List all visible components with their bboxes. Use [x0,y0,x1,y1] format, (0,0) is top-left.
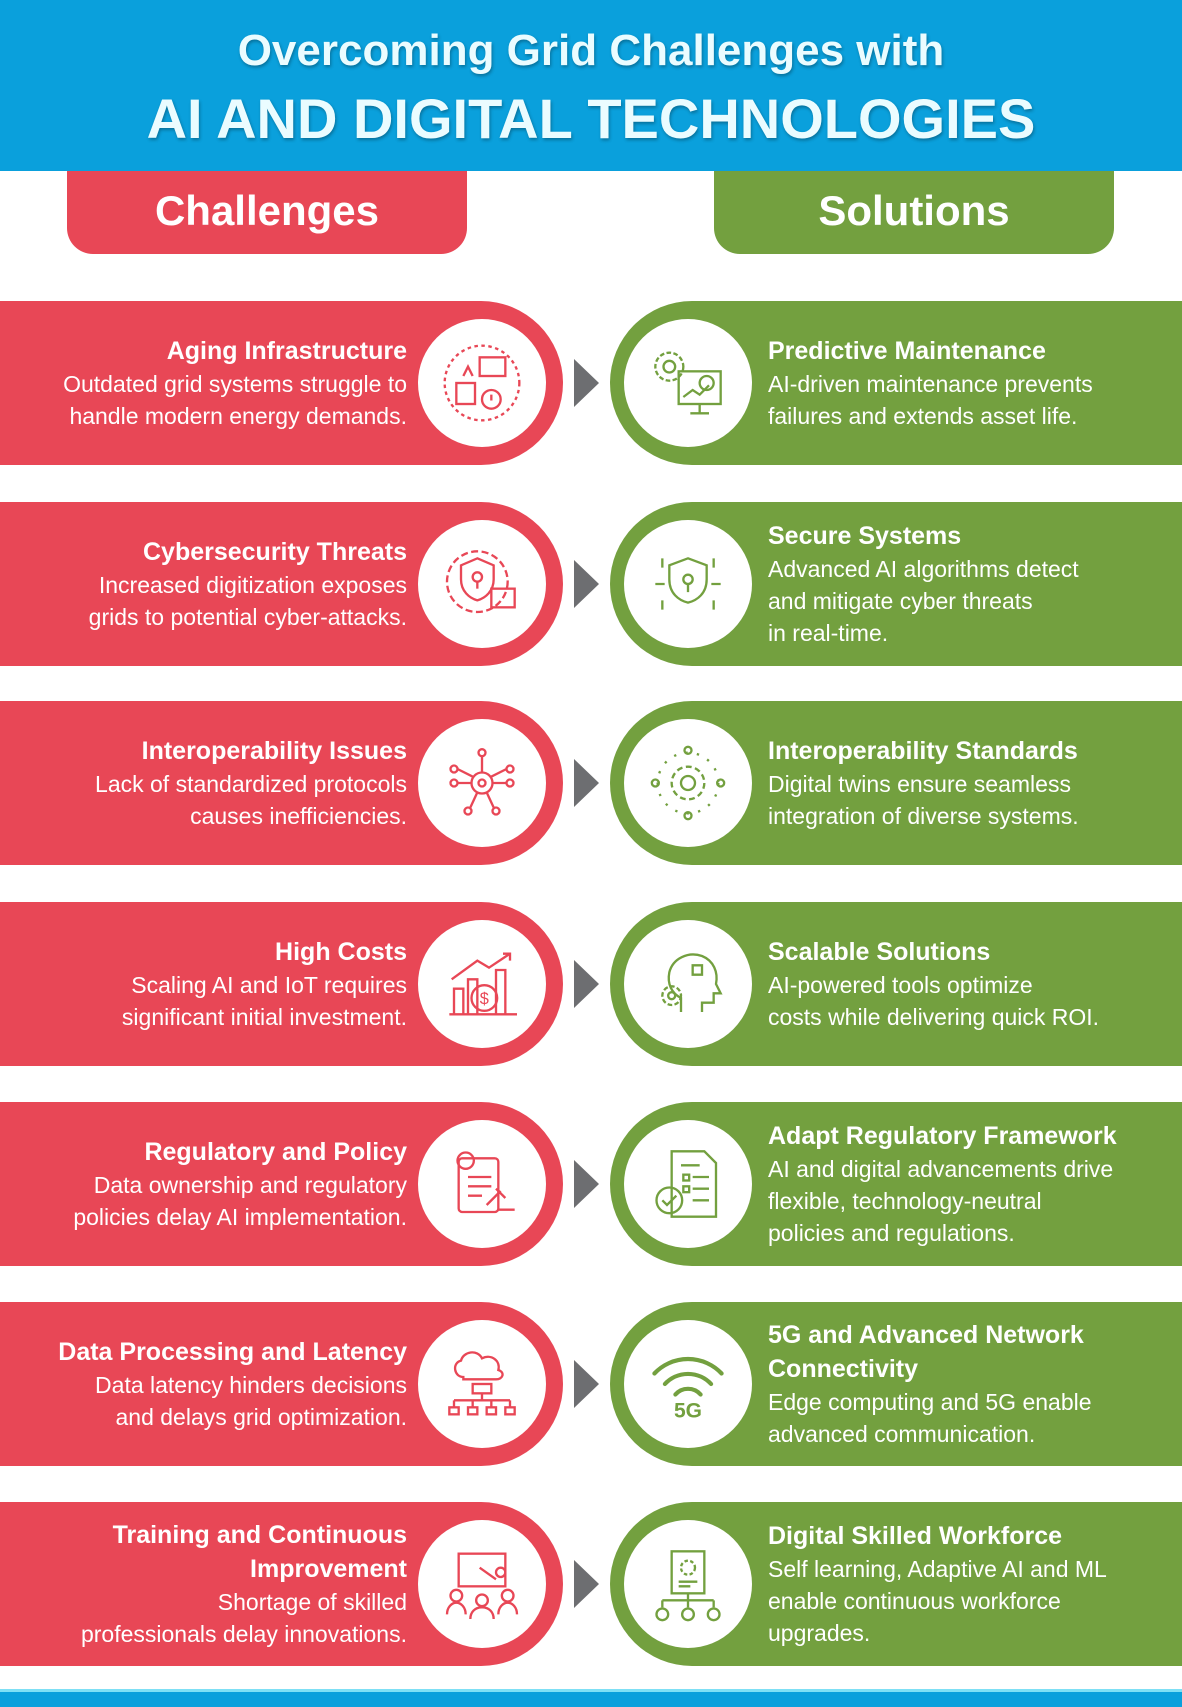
text: advanced communication. [768,1421,1035,1447]
tab: solutions: Solutions [818,187,1010,234]
solution 7 [610,1502,1182,1666]
challenge 5 [0,1102,563,1266]
solution 3 [610,701,1182,865]
text: Data ownership and regulatory [94,1172,407,1198]
arrow [574,960,599,1008]
text: Connectivity [768,1355,918,1383]
header [0,0,1182,171]
text [768,1321,1092,1447]
icon: high costs chart [418,920,546,1048]
text: enable continuous workforce [768,1588,1061,1614]
icon: framework document [624,1120,752,1248]
text: Improvement [250,1555,407,1583]
icon: interoperability network [418,719,546,847]
text [63,337,407,429]
tab: solutions [714,171,1114,254]
icon: predictive maintenance [624,319,752,447]
icon: workforce [624,1520,752,1648]
icon: aging infrastructure [418,319,546,447]
text [768,1522,1107,1646]
arrow [574,1160,599,1208]
tab: challenges: Challenges [155,187,379,234]
challenge 1 [0,301,563,465]
text: Interoperability Standards [768,737,1078,765]
text [768,1122,1117,1246]
text: Data latency hinders decisions [95,1372,407,1398]
text [122,938,407,1030]
text: Regulatory and Policy [144,1138,407,1166]
icon: 5G signal: 5G [674,1400,702,1423]
text: Interoperability Issues [142,737,407,765]
text: Secure Systems [768,522,961,550]
text: AI-powered tools optimize [768,972,1033,998]
text: Outdated grid systems struggle to [63,371,407,397]
text: AI-driven maintenance prevents [768,371,1093,397]
text: Digital Skilled Workforce [768,1522,1062,1550]
text: costs while delivering quick ROI. [768,1004,1099,1030]
tab: challenges [67,171,467,254]
arrow [574,1360,599,1408]
challenge 4 [0,902,563,1066]
text: flexible, technology-neutral [768,1188,1042,1214]
footer bar [0,1689,1182,1707]
text: Adapt Regulatory Framework [768,1122,1117,1150]
text: Scaling AI and IoT requires [131,972,407,998]
text: significant initial investment. [122,1004,407,1030]
text: Training and Continuous [113,1521,407,1549]
text: Increased digitization exposes [99,572,407,598]
solution 6 [610,1302,1182,1466]
text: professionals delay innovations. [81,1621,407,1647]
icon: scalable head gears [624,920,752,1048]
text [768,938,1099,1030]
challenge 3 [0,701,563,865]
arrow [574,359,599,407]
solution 2 [610,502,1182,666]
text: Digital twins ensure seamless [768,771,1071,797]
text [81,1521,407,1647]
text: Edge computing and 5G enable [768,1389,1092,1415]
text [58,1338,407,1430]
text: Self learning, Adaptive AI and ML [768,1556,1107,1582]
text: upgrades. [768,1620,870,1646]
text: in real-time. [768,620,888,646]
text: Predictive Maintenance [768,337,1046,365]
title line 1: Overcoming Grid Challenges with [238,26,944,75]
text [768,737,1079,829]
icon: training [418,1520,546,1648]
text: grids to potential cyber-attacks. [89,604,407,630]
text: Scalable Solutions [768,938,990,966]
text: Data Processing and Latency [58,1338,407,1366]
text: Cybersecurity Threats [143,538,407,566]
icon: high costs chart: $ [480,990,489,1008]
text [95,737,407,829]
text: failures and extends asset life. [768,403,1077,429]
text: and delays grid optimization. [116,1404,407,1430]
icon: 5G signal [624,1320,752,1448]
text: and mitigate cyber threats [768,588,1033,614]
icon: gear network [624,719,752,847]
text: AI and digital advancements drive [768,1156,1113,1182]
solution 4 [610,902,1182,1066]
text: High Costs [275,938,407,966]
text: handle modern energy demands. [69,403,407,429]
icon: cybersecurity [418,520,546,648]
text: Lack of standardized protocols [95,771,407,797]
challenge 7 [0,1502,563,1666]
solution 5 [610,1102,1182,1266]
text [73,1138,407,1230]
text: integration of diverse systems. [768,803,1079,829]
text [768,337,1093,429]
text: Advanced AI algorithms detect [768,556,1079,582]
text [768,522,1079,646]
icon: cloud data [418,1320,546,1448]
arrow [574,759,599,807]
text: 5G and Advanced Network [768,1321,1084,1349]
text: Aging Infrastructure [167,337,407,365]
solution 1 [610,301,1182,465]
text: causes inefficiencies. [190,803,407,829]
challenge 6 [0,1302,563,1466]
icon: secure shield [624,520,752,648]
icon: regulatory clipboard [418,1120,546,1248]
text: policies and regulations. [768,1220,1015,1246]
title line 2: AI AND DIGITAL TECHNOLOGIES [147,87,1035,150]
arrow [574,1560,599,1608]
challenge 2 [0,502,563,666]
arrow [574,560,599,608]
text: Shortage of skilled [218,1589,407,1615]
text: policies delay AI implementation. [73,1204,407,1230]
text [89,538,407,630]
